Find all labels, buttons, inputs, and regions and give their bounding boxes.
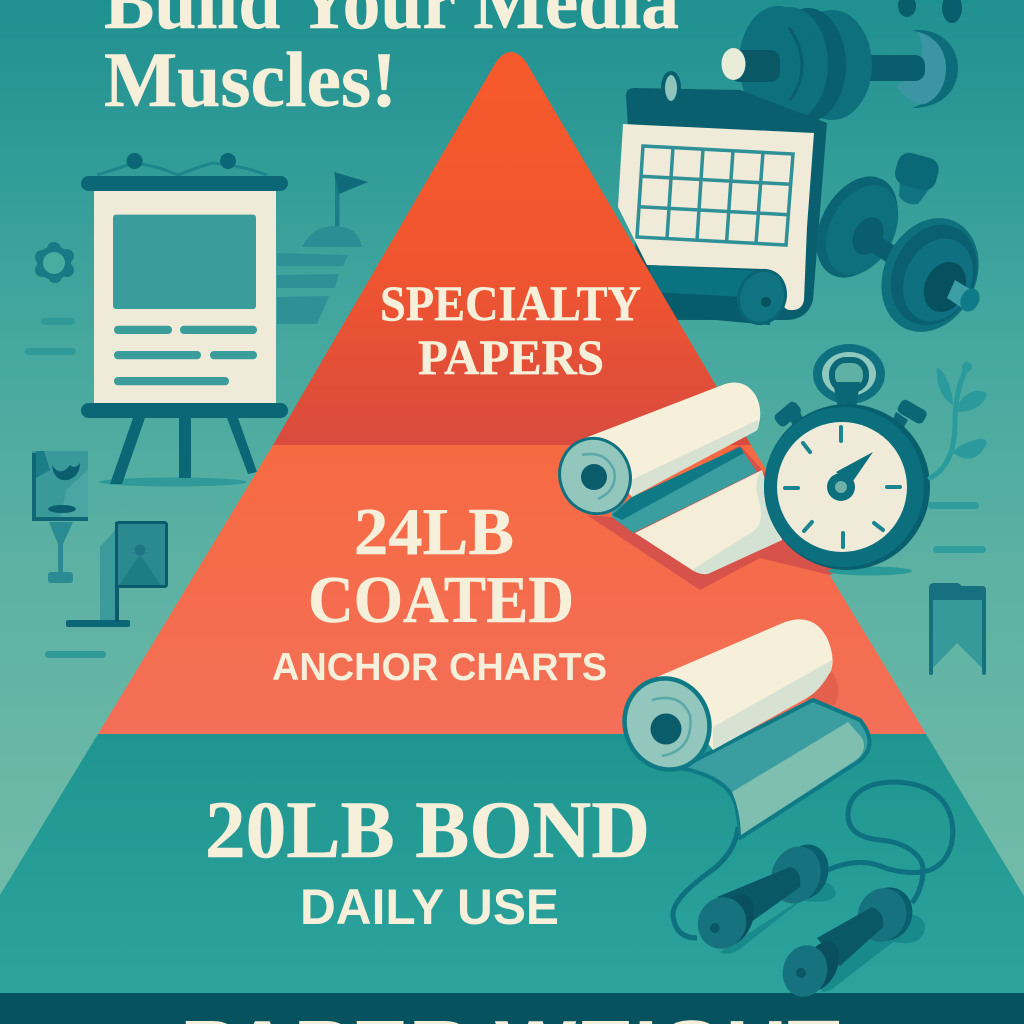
tier label: 20lb bond	[205, 784, 650, 935]
icon: plant sprig	[930, 362, 987, 478]
footer band	[0, 993, 1024, 1024]
easel bottom bar	[81, 403, 288, 418]
tier label: 24lb coated: ANCHOR CHARTS	[272, 646, 607, 689]
watch shadow	[828, 566, 912, 576]
easel decoration curves	[97, 163, 267, 175]
calendar backing	[626, 88, 827, 320]
sheet light band	[732, 722, 864, 835]
icon: dumbbell	[800, 150, 997, 348]
watch needle and hub	[827, 452, 873, 501]
tier: 24lb coated	[98, 445, 926, 734]
calendar roller	[650, 265, 770, 325]
icon: jump rope	[673, 782, 953, 1002]
watch buttons	[773, 398, 928, 434]
roll shadow	[587, 445, 850, 590]
watch ring	[813, 344, 885, 404]
title line 2: Muscles!	[104, 36, 397, 123]
dashes left	[25, 318, 106, 658]
icon: calendar	[618, 73, 827, 330]
icon: barbell	[722, 0, 962, 122]
dumbbell right plate	[863, 202, 997, 348]
easel legs and shadow	[99, 418, 257, 486]
icon: paper roll lower	[612, 619, 870, 838]
icon: picture flag	[66, 522, 166, 627]
poster text lines	[114, 326, 257, 385]
calendar page	[618, 124, 814, 310]
roll body	[657, 619, 833, 750]
watch body	[764, 404, 930, 570]
title	[104, 0, 679, 123]
icon: stopwatch	[764, 344, 930, 576]
tier: 20lb bond	[0, 734, 1024, 993]
poster image block	[113, 215, 256, 309]
dashes right	[928, 502, 986, 553]
rope handle 1	[691, 838, 836, 956]
tier label: 24lb coated	[272, 495, 607, 689]
roll end cap	[549, 428, 641, 524]
calendar ring	[663, 73, 679, 103]
watch ticks	[785, 427, 900, 547]
icon: presentation easel	[81, 153, 288, 486]
watch dial	[777, 422, 907, 552]
icon: paper roll upper	[549, 382, 850, 590]
dumbbell left plate	[800, 162, 914, 292]
tier label: specialty papers	[380, 275, 641, 385]
icon: flower	[35, 242, 74, 283]
roll body	[585, 382, 760, 497]
calendar grid	[637, 146, 793, 245]
watch stem	[833, 382, 860, 408]
rope handle 2	[777, 880, 920, 1002]
roll shadow	[805, 660, 838, 705]
tier label: 24lb coated: 24LB	[354, 495, 514, 569]
easel top bar	[81, 176, 288, 191]
cream sheet	[635, 470, 782, 574]
unrolling sheet	[680, 700, 870, 838]
tier label: 24lb coated: COATED	[308, 563, 574, 637]
small weight	[892, 150, 941, 204]
icon: goblet poster	[32, 451, 88, 583]
tier label: 20lb bond: 20LB BOND	[205, 784, 650, 875]
tier label: specialty papers: PAPERS	[418, 329, 604, 385]
easel pins	[126, 153, 236, 169]
tier: specialty papers	[273, 52, 751, 445]
poster sheet	[94, 191, 276, 403]
tier label: 20lb bond: DAILY USE	[300, 879, 559, 935]
icon: bookmark	[929, 583, 986, 675]
roll end cap	[612, 666, 722, 782]
rope handle shadows	[720, 882, 925, 992]
icon: flag on mound	[277, 172, 368, 324]
teal backing sheet	[612, 447, 757, 533]
rope cord	[673, 827, 738, 938]
tier label: specialty papers: SPECIALTY	[380, 275, 641, 331]
